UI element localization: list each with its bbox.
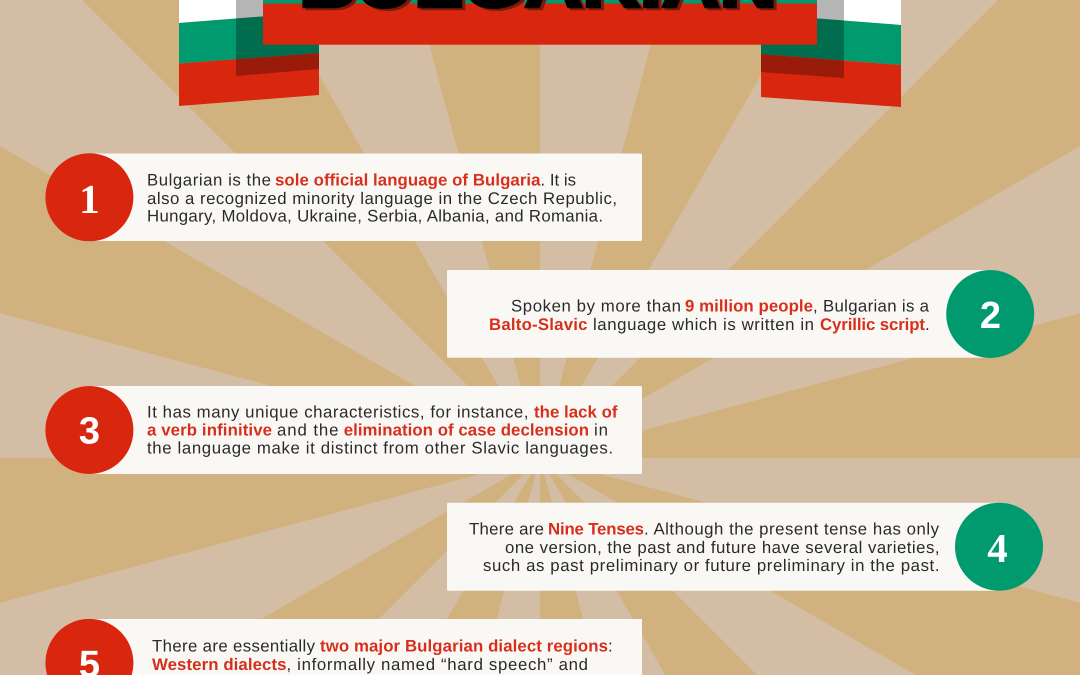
panel: fact 5 xyxy=(45,619,642,675)
text: fact 2: 9 million people xyxy=(685,297,813,316)
panel: fact 4 xyxy=(447,503,1043,591)
right flag ribbon xyxy=(761,0,901,107)
badge 2: 2 xyxy=(980,295,1001,337)
text: fact 2: language which is written in xyxy=(593,315,814,334)
text: fact 1: sole official language of Bulgaria xyxy=(275,170,541,189)
text: fact 3: a verb infinitive xyxy=(147,421,272,440)
text: fact 2 xyxy=(489,297,930,334)
badge 3: 3 xyxy=(79,410,100,452)
left flag ribbon xyxy=(179,0,319,106)
text: fact 4: . Although the present tense has only xyxy=(644,519,940,538)
panel: fact 3 xyxy=(45,386,642,474)
badge 1: 1 xyxy=(79,176,100,222)
badge 3 xyxy=(45,386,133,474)
text: fact 5 xyxy=(152,637,613,674)
text: fact 3: elimination of case declension xyxy=(344,421,589,440)
panel: fact 1 xyxy=(45,153,642,241)
text: fact 3: It has many unique characteristics, for instance, xyxy=(147,402,528,421)
text: fact 5: , informally named “hard speech” and xyxy=(286,655,588,674)
text: fact 2: . xyxy=(925,315,930,334)
text: fact 4 xyxy=(469,519,940,575)
text: fact 5: There are essentially xyxy=(152,637,316,656)
badge 5 xyxy=(45,619,133,675)
text: fact 1 xyxy=(147,170,617,226)
text: fact 4: Nine Tenses xyxy=(548,519,644,538)
text: fact 2: Spoken by more than xyxy=(511,297,681,316)
text: fact 1: Bulgarian is the xyxy=(147,170,271,189)
text: fact 2: Balto-Slavic xyxy=(489,315,588,334)
text: fact 4: such as past preliminary or future preliminary in the past. xyxy=(483,556,940,575)
text: fact 5: two major Bulgarian dialect regions xyxy=(320,637,608,656)
text: fact 3: and the xyxy=(277,421,338,440)
text: fact 4: There are xyxy=(469,519,544,538)
text: fact 1: also a recognized minority language in the Czech Republic, xyxy=(147,189,617,208)
text: fact 3: in xyxy=(594,421,608,440)
title banner xyxy=(263,0,817,45)
text: fact 2: , Bulgarian is a xyxy=(813,297,930,316)
badge 2 xyxy=(946,270,1034,358)
text: fact 1: Hungary, Moldova, Ukraine, Serbia, Albania, and Romania. xyxy=(147,207,603,226)
text: fact 4: one version, the past and future have several varieties, xyxy=(505,538,940,557)
badge 4 xyxy=(955,503,1043,591)
badge 1 xyxy=(45,153,133,241)
panel: fact 2 xyxy=(447,270,1034,358)
text: fact 5: Western dialects xyxy=(152,655,286,674)
text: fact 3: the language make it distinct from other Slavic languages. xyxy=(147,439,613,458)
text: fact 2: Cyrillic script xyxy=(820,315,925,334)
text: fact 3 xyxy=(147,402,618,458)
text: fact 3: the lack of xyxy=(534,402,618,421)
text: fact 1: . It is xyxy=(540,170,576,189)
badge 4: 4 xyxy=(987,525,1008,571)
text: fact 5: : xyxy=(608,637,613,656)
